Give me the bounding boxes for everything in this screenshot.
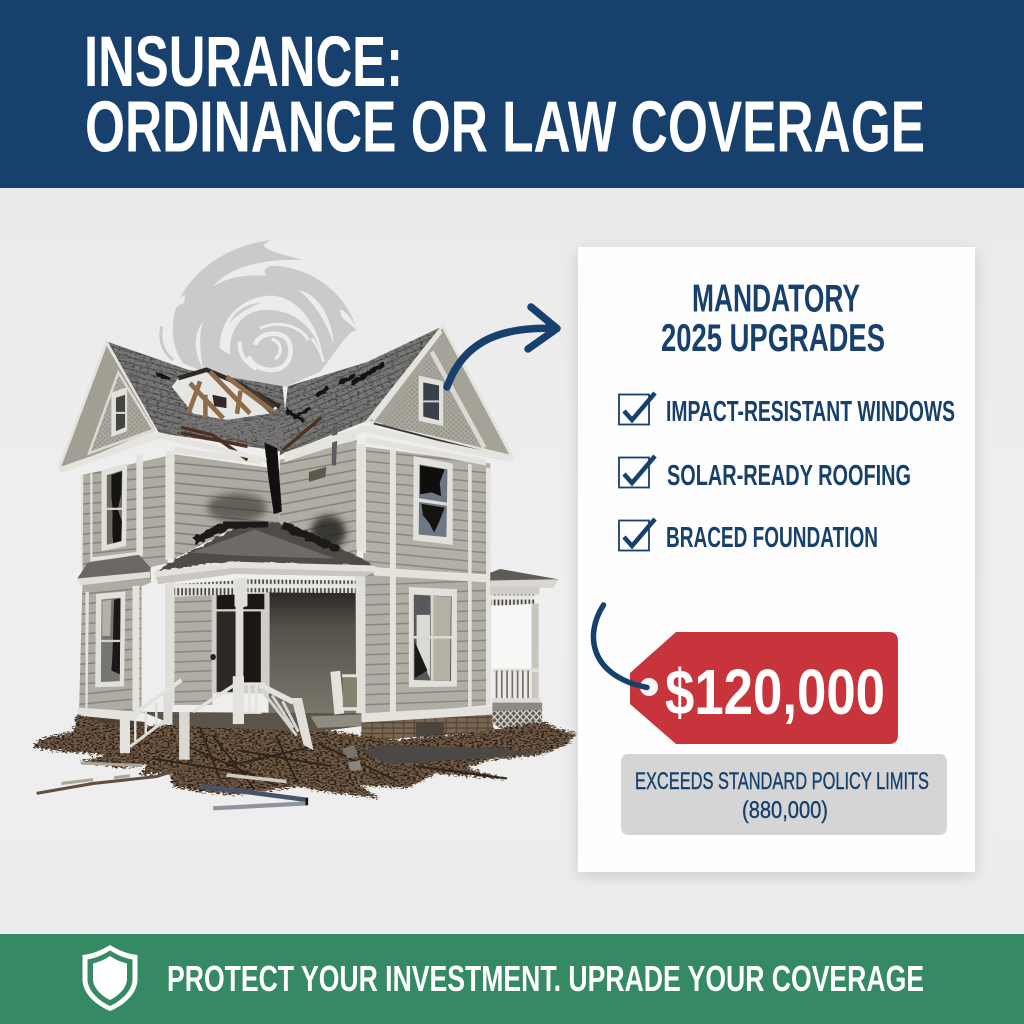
- footer banner: [0, 934, 1024, 1024]
- right side porch: [490, 569, 558, 734]
- porch frieze: [171, 579, 356, 597]
- porch roof: [155, 523, 376, 584]
- price tag: $120,000: [665, 656, 885, 728]
- soot stains: [116, 493, 346, 567]
- porch interior: [172, 590, 356, 714]
- left wing wall: [79, 456, 168, 713]
- left bay roof: [77, 555, 150, 581]
- right wall lower: [363, 573, 490, 716]
- center wall right face: [280, 440, 357, 559]
- eaves fascia: [59, 425, 513, 472]
- checklist item: foundation: BRACED FOUNDATION: [666, 522, 878, 554]
- wall trim boards: [78, 433, 493, 723]
- icon: shield: [82, 945, 138, 1011]
- arrow from house to panel: [447, 307, 557, 387]
- price tag: [593, 605, 898, 744]
- porch columns: [165, 577, 365, 714]
- checklist item: foundation: [619, 519, 878, 554]
- panel heading: 2025 UPGRADES: [661, 317, 885, 360]
- panel heading: [661, 278, 885, 360]
- panel heading: MANDATORY: [692, 278, 860, 320]
- panel: mandatory upgrades: [578, 247, 975, 876]
- header banner: [0, 0, 1024, 188]
- left upper window: [102, 463, 127, 551]
- foundation: [79, 713, 493, 741]
- left gable: [59, 343, 157, 471]
- right lower window: [409, 587, 457, 687]
- right wall upper: [363, 446, 490, 575]
- right roof: [280, 328, 440, 455]
- right gable: [367, 326, 512, 457]
- left roof: [108, 342, 285, 451]
- bay fascia: [77, 572, 150, 585]
- debris pile: [35, 715, 577, 808]
- illustration: storm-damaged house: [35, 326, 577, 808]
- policy limit note: (880,000): [742, 797, 828, 824]
- policy limit note: [621, 754, 947, 835]
- center wall left face: [173, 454, 280, 559]
- checklist item: roofing: SOLAR-READY ROOFING: [667, 460, 911, 492]
- roof damage: [156, 364, 384, 514]
- right upper window: [413, 456, 453, 545]
- checklist item: windows: [619, 393, 955, 428]
- left lower window: [95, 592, 125, 687]
- icon: hurricane swirl: [161, 240, 357, 387]
- checklist item: roofing: [619, 456, 911, 492]
- front steps and railings: [120, 671, 362, 760]
- header banner: INSURANCE:: [84, 23, 403, 102]
